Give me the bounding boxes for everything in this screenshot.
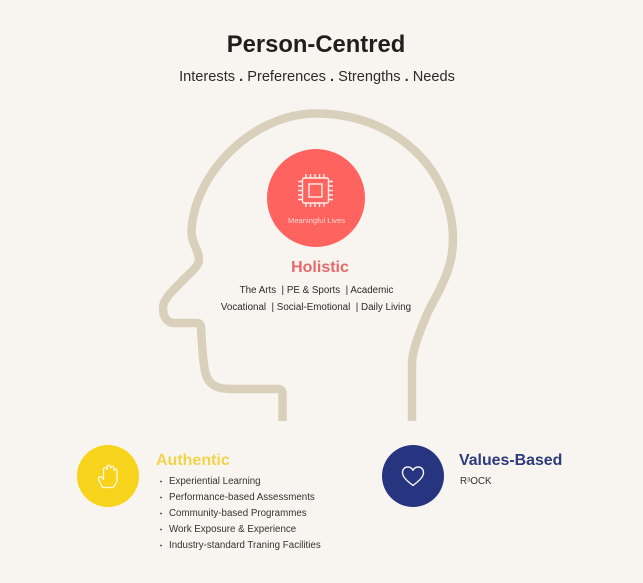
heading: values-based: Values-Based <box>459 452 562 469</box>
icon: heart <box>402 467 424 486</box>
holistic line 2: Vocational | Social-Emotional | Daily Living <box>221 302 411 313</box>
yellow circle <box>77 445 139 507</box>
item 3: Community-based Programmes <box>169 508 307 519</box>
red circle <box>267 149 365 247</box>
item 1: Experiential Learning <box>169 476 261 487</box>
icon: hand <box>98 465 117 488</box>
navy circle <box>382 445 444 507</box>
title: Person-Centred <box>227 31 405 58</box>
circle caption: Meaningful Lives <box>288 216 345 225</box>
authentic list <box>160 476 321 551</box>
panel: authentic <box>77 445 321 551</box>
item 5: Industry-standard Traning Facilities <box>169 540 321 551</box>
holistic line 1: The Arts | PE & Sports | Academic <box>240 285 393 296</box>
panel: values-based <box>382 445 562 507</box>
heading: holistic: Holistic <box>291 259 349 276</box>
head outline <box>163 114 453 421</box>
values text: R³OCK <box>460 476 492 487</box>
panel: holistic <box>221 149 411 313</box>
subtitle: Interests . Preferences . Strengths . Needs <box>179 69 455 85</box>
item 2: Performance-based Assessments <box>169 492 315 503</box>
icon: microchip <box>298 174 333 207</box>
heading: authentic: Authentic <box>156 452 230 469</box>
item 4: Work Exposure & Experience <box>169 524 296 535</box>
